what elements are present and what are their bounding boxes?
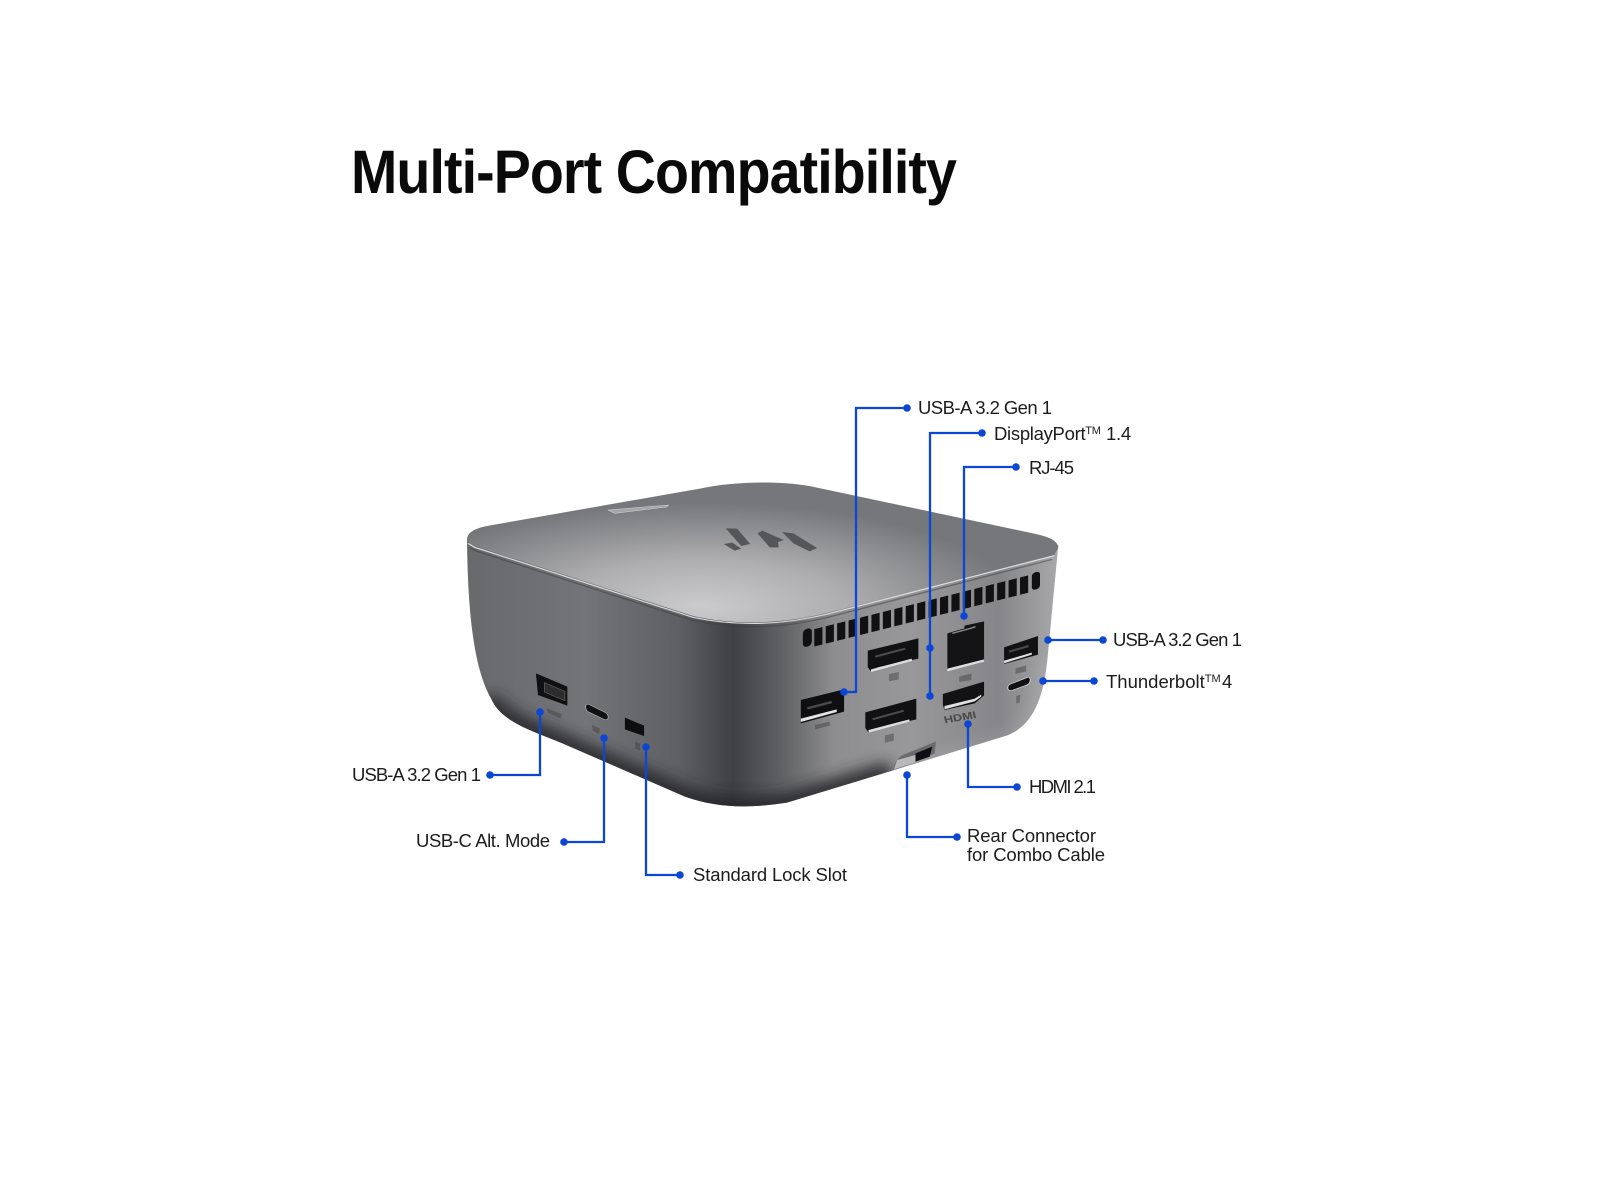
callout: Thunderbolt: 4 [1222, 671, 1232, 692]
top seam shadow [469, 547, 1052, 627]
device body [467, 540, 1058, 806]
docking station device [467, 482, 1058, 810]
callout: DisplayPort: TM [1085, 425, 1101, 437]
top indent button [608, 505, 669, 513]
callout: USB-C [416, 734, 608, 851]
callout: USB-A right: USB-A 3.2 Gen 1 [1113, 629, 1242, 650]
callout: USB-C: USB-C Alt. Mode [416, 830, 550, 851]
port: USB-A rear left [801, 689, 844, 723]
callout: Thunderbolt: TM [1205, 673, 1221, 685]
port: lock slot [625, 718, 644, 736]
callout: USB-A top [840, 397, 1052, 696]
top front edge highlight [468, 543, 1054, 623]
logo [724, 528, 817, 551]
callout: USB-A left: USB-A 3.2 Gen 1 [352, 764, 481, 785]
port: USB-C side [586, 704, 608, 720]
title: Multi-Port Compatibility [351, 138, 957, 206]
port markings [547, 665, 1026, 751]
port: DisplayPort upper [868, 638, 918, 672]
port: Thunderbolt [1008, 677, 1030, 691]
callout: USB-A left [352, 708, 544, 785]
callout: Lock: Standard Lock Slot [693, 864, 847, 885]
port: USB-A rear right [1004, 636, 1038, 664]
callout: Rear Connector: for Combo Cable [967, 844, 1105, 865]
HDMI marking: HDMI [943, 710, 978, 726]
callout: DisplayPort [926, 423, 1131, 700]
callout: RJ-45: RJ-45 [1029, 457, 1074, 478]
port: RJ-45 [947, 621, 984, 671]
callout: USB-A right [1044, 629, 1242, 650]
callout: Rear Connector [903, 771, 1105, 865]
callout: RJ-45 [960, 457, 1074, 620]
vents [803, 570, 1040, 649]
callout: Lock [642, 743, 847, 885]
callout: HDMI [964, 720, 1096, 797]
callout: HDMI: HDMI 2.1 [1029, 776, 1096, 797]
callout: DisplayPort: DisplayPort [994, 423, 1085, 444]
callout: Rear Connector: Rear Connector [967, 825, 1096, 846]
callout: USB-A top: USB-A 3.2 Gen 1 [918, 397, 1052, 418]
device top surface [467, 482, 1058, 622]
port: rear connector notch [893, 742, 936, 769]
port: USB-A side [536, 673, 567, 706]
callout: Thunderbolt: Thunderbolt [1106, 671, 1205, 692]
callout: DisplayPort: 1.4 [1106, 423, 1131, 444]
device bottom shading [486, 688, 900, 806]
port: DisplayPort lower [865, 699, 916, 733]
port: HDMI [943, 682, 984, 710]
callout: Thunderbolt [1039, 671, 1232, 692]
